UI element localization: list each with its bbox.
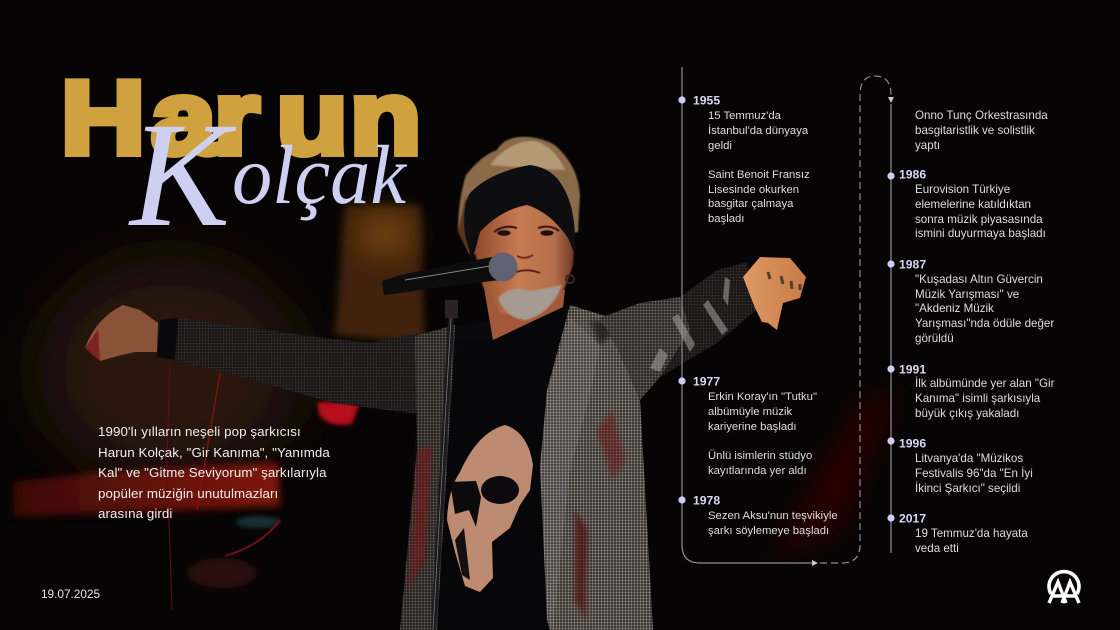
red lamp (317, 402, 360, 425)
timeline entry: 1986 (899, 168, 1046, 240)
timeline entry: 1987: görüldü (915, 332, 954, 345)
timeline entry: 1955: geldi (708, 140, 732, 152)
timeline entry: 2017: 19 Temmuz'da hayata (915, 527, 1028, 540)
intro text (98, 424, 330, 521)
timeline entry: 1977 (693, 374, 817, 477)
mic stand (431, 300, 458, 630)
timeline entry: 1955: 15 Temmuz'da (708, 110, 782, 122)
jacket: left panel (400, 325, 455, 630)
timeline entry: 1955: Saint Benoit Fransız (708, 169, 810, 181)
timeline entry: 1977: kayıtlarında yer aldı (708, 465, 807, 477)
timeline entry: orchestra: yaptı (915, 139, 940, 152)
title: Harun: Harun (61, 60, 421, 176)
timeline entry: 1987 (899, 258, 1054, 345)
date: 19.07.2025 (41, 587, 100, 601)
intro text: popüler müziğin unutulmazları (98, 486, 278, 501)
intro text: 1990'lı yılların neşeli pop şarkıcısı (98, 424, 301, 439)
timeline entry: 1955: İstanbul'da dünyaya (708, 124, 809, 137)
timeline entry: 1977: kariyerine başladı (708, 421, 797, 433)
timeline dots (678, 96, 895, 522)
timeline entry: 1987: 1987 (899, 258, 926, 272)
shirt: black t-shirt (437, 307, 570, 630)
timeline entry: 2017 (899, 512, 1028, 555)
timeline entry: 1986: sonra müzik piyasasında (915, 213, 1043, 226)
microphone (382, 252, 518, 295)
timeline entry: 1955: başladı (708, 213, 744, 225)
timeline entry: 1977: 1977 (693, 374, 720, 388)
intro text: arasına girdi (98, 506, 172, 521)
timeline entry: 1991: büyük çıkış yakaladı (915, 407, 1019, 420)
timeline entry: 1986: ismini duyurmaya başladı (915, 227, 1046, 240)
jacket: right panel and lapel (540, 305, 653, 630)
headband (464, 165, 575, 262)
intro text: Harun Kolçak, "Gir Kanıma", "Yanımda (98, 445, 330, 460)
timeline entry: 1955 (693, 94, 810, 225)
ear ring (566, 275, 574, 283)
timeline entry: 1996: Festivalis 96"da "En İyi (915, 467, 1033, 480)
red sign (13, 463, 280, 517)
timeline connector line (682, 67, 894, 566)
timeline entry: 1987: Yarışması"nda ödüle değer (915, 317, 1054, 330)
hair (458, 137, 580, 255)
timeline entry: 1987: "Kuşadası Altın Güvercin (915, 273, 1043, 286)
intro text: Kal" ve "Gitme Seviyorum" şarkılarıyla (98, 465, 327, 480)
timeline entry: 1996: 1996 (899, 436, 926, 450)
timeline entry: 1991: İlk albümünde yer alan "Gir (915, 377, 1055, 390)
timeline entry: 1978: 1978 (693, 494, 720, 508)
timeline entry: orchestra: basgitaristlik ve solistlik (915, 124, 1035, 137)
timeline entry: 2017: veda etti (915, 542, 959, 555)
face (472, 203, 574, 320)
left arm and hand (85, 305, 422, 413)
title: Kolçak letters: olçak (232, 129, 408, 222)
timeline entry: 1987: "Akdeniz Müzik (915, 302, 994, 315)
skull print on shirt (447, 425, 533, 592)
jacket: dark inner layer (400, 305, 653, 630)
timeline entry: 1955: 1955 (693, 94, 720, 108)
timeline entry: 1978: şarkı söylemeye başladı (708, 525, 829, 537)
timeline entry: orchestra (915, 109, 1048, 152)
timeline entry: 1978: Sezen Aksu'nun teşvikiyle (708, 510, 838, 522)
timeline entry: orchestra: Onno Tunç Orkestrasında (915, 109, 1048, 122)
timeline entry: 1996: İkinci Şarkıcı" seçildi (915, 482, 1020, 495)
timeline entry: 1991: Kanıma" isimli şarkısıyla (915, 392, 1041, 405)
logo: AA (1049, 572, 1079, 603)
timeline entry: 1977: Ünlü isimlerin stüdyo (708, 450, 812, 462)
timeline entry: 1986: Eurovision Türkiye (915, 183, 1010, 196)
timeline entry: 1996 (899, 436, 1033, 495)
timeline entry: 1987: Müzik Yarışması" ve (915, 288, 1019, 301)
neck (484, 288, 565, 340)
timeline entry: 1955: Lisesinde okurken (708, 184, 799, 196)
timeline entry: 1996: Litvanya'da "Müzikos (915, 452, 1023, 465)
timeline entry: 1986: 1986 (899, 168, 926, 182)
timeline entry: 1955: basgitar çalmaya (708, 198, 794, 210)
timeline entry: 1977: Erkin Koray'ın "Tutku" (708, 391, 817, 403)
photo: singer with microphone (85, 137, 806, 630)
timeline entry: 1991: 1991 (899, 362, 926, 376)
timeline entry: 1978 (693, 494, 838, 537)
timeline entry: 1986: elemelerine katıldıktan (915, 198, 1031, 211)
timeline entry: 1991 (899, 362, 1055, 420)
title: Kolçak K: K (128, 92, 237, 258)
timeline entry: 1977: albümüyle müzik (708, 406, 792, 418)
timeline entry: 2017: 2017 (899, 512, 926, 526)
right arm and hand (600, 257, 806, 400)
